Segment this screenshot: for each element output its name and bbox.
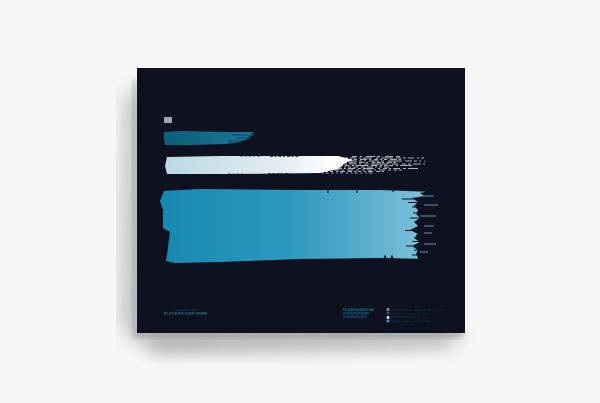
logo: left footer: Placeholder title — [174, 308, 197, 312]
logo: left footer — [164, 308, 208, 316]
footer title block: PLACEHOLDER — [343, 315, 367, 319]
dark bristle gaps — [402, 199, 430, 255]
footer title block: PLACEHOLDER LINE — [343, 312, 369, 316]
blue bristle tips — [418, 196, 438, 252]
logo: left footer: PLACEHOLDER NAME — [164, 312, 208, 316]
legend swatch — [164, 117, 172, 123]
brush bar: large blue — [160, 189, 445, 263]
legend list: Placeholder entry two — [391, 312, 428, 316]
footer title block — [343, 308, 374, 319]
legend list: Placeholder entry four — [391, 319, 430, 323]
poster panel — [137, 68, 465, 333]
legend list: Placeholder legend entry one — [391, 308, 444, 312]
panel shadow — [124, 80, 463, 352]
dark right edge — [410, 190, 445, 261]
footer title block: PLACEHOLDER LINE — [343, 308, 374, 312]
legend list — [386, 308, 444, 323]
brush bar: white — [165, 156, 428, 174]
dark top and bottom flecks — [228, 156, 322, 174]
brush flecks — [328, 190, 393, 258]
frayed bristles — [322, 156, 428, 173]
brush bar: teal — [164, 131, 254, 145]
legend list: Placeholder three — [391, 315, 420, 319]
